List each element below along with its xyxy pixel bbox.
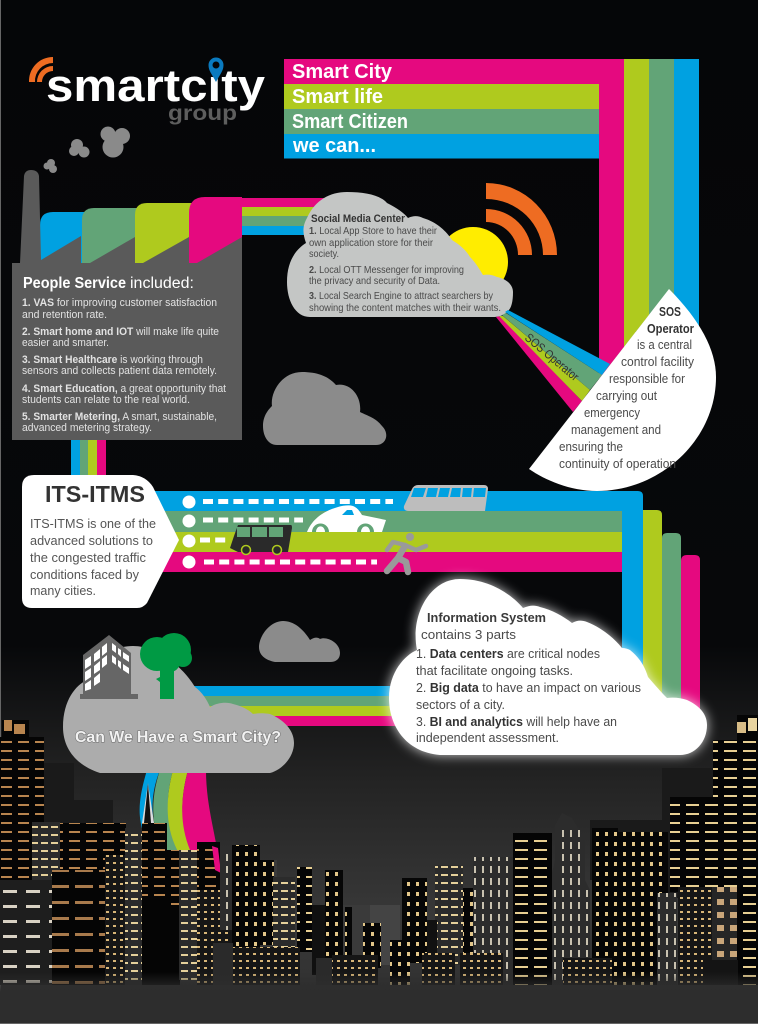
- panel: its-itms: the congested traffic: [30, 550, 146, 565]
- logo: smartcity group: [29, 57, 265, 125]
- panel: people service: People Service: [23, 275, 126, 292]
- panel: people service: 4. Smart Education, a great opportunity that: [22, 383, 226, 395]
- panel: its-itms: ITS-ITMS: [45, 481, 145, 507]
- panel: social media center cloud: showing the content matches with their wants.: [309, 303, 501, 314]
- logo: smartcity group: smartcity: [46, 60, 265, 111]
- panel: people service: easier and smarter.: [22, 337, 109, 349]
- panel: social media center cloud: Social Media Center: [311, 213, 406, 225]
- panel: social media center cloud: [287, 192, 513, 317]
- panel: social media center cloud: 3. Local Search Engine to attract searchers by: [309, 291, 494, 302]
- panel: information system cloud: [389, 579, 707, 755]
- panel: information system cloud: independent assessment.: [416, 730, 559, 745]
- panel: people service: students can relate to the real world.: [22, 394, 190, 406]
- icon: bus: [230, 525, 292, 554]
- panel: social media center cloud: 2. Local OTT Messenger for improving: [309, 265, 464, 276]
- panel: information system cloud: 2. Big data to have an impact on various: [416, 680, 641, 695]
- road stripes: verticals right: [150, 491, 700, 730]
- panel: its-itms: advanced solutions to: [30, 533, 153, 548]
- panel: people service: and retention rate.: [22, 309, 107, 321]
- icon: building: [80, 635, 138, 699]
- skyline: left buildings: [0, 720, 381, 985]
- heading stripes: smart city, life, citizen, we can: we can...: [292, 135, 376, 157]
- decorative cloud: small: [259, 621, 340, 662]
- skyline ground fade: [0, 972, 758, 1024]
- icon: car: [307, 505, 386, 532]
- panel: social media center cloud: 1. Local App Store to have their: [309, 226, 438, 237]
- panel: can we have a smart city cloud: [63, 646, 294, 773]
- road stripes: horizontal lanes: [150, 511, 622, 572]
- decorative cloud: middle: [263, 372, 386, 445]
- panel: sos operator wedge: Operator: [647, 321, 694, 336]
- panel: sos operator wedge: carrying out: [596, 388, 657, 403]
- logo: smartcity group: group: [168, 102, 237, 125]
- panel: sos operator wedge: is a central: [637, 337, 692, 352]
- panel: information system cloud: 1. Data centers are critical nodes: [416, 646, 600, 661]
- skyline: background towers: [44, 763, 722, 965]
- icon: tree: [140, 633, 192, 699]
- heading stripes: smart city, life, citizen, we can: Smart City: [292, 61, 393, 83]
- panel: social media center cloud: the privacy and security of Data.: [309, 276, 440, 287]
- panel: sos operator wedge: responsible for: [609, 371, 686, 386]
- panel: people service: advanced metering strategy.: [22, 422, 152, 434]
- icon: sun: [438, 227, 508, 297]
- panel: people service: included:: [130, 275, 194, 292]
- stem stripes below factory: [71, 438, 106, 478]
- panel: can we have a smart city cloud: Can We Have a Smart City?: [75, 729, 281, 746]
- panel: sos operator wedge: continuity of operation: [559, 456, 676, 471]
- panel: people service: 5. Smarter Metering, A smart, sustainable,: [22, 411, 217, 423]
- icon: wifi arcs: [486, 183, 557, 255]
- panel: sos operator wedge: management and: [571, 422, 661, 437]
- panel: sos operator wedge: ensuring the: [559, 439, 623, 454]
- heading stripes: smart city, life, citizen, we can: [284, 59, 699, 379]
- icon: factory smoke: [44, 126, 130, 173]
- panel: information system cloud: contains 3 parts: [421, 627, 516, 642]
- icon: train: [404, 485, 488, 511]
- lower stripes to cloud: [190, 686, 410, 726]
- stripes from factory to social cloud: [240, 198, 330, 235]
- panel: its-itms: conditions faced by: [30, 567, 139, 582]
- panel: information system cloud: that facilitate ongoing tasks.: [416, 663, 573, 678]
- panel: sos operator wedge: SOS: [659, 304, 681, 319]
- panel: sos operator wedge: control facility: [621, 354, 694, 369]
- rainbow arc under cloud: [140, 770, 220, 872]
- panel: information system cloud: Information System: [427, 610, 546, 625]
- panel: social media center cloud: society.: [309, 249, 339, 260]
- panel: information system cloud: 3. BI and analytics will help have an: [416, 714, 617, 729]
- panel: people service: 3. Smart Healthcare is working through: [22, 354, 203, 366]
- panel: its-itms: ITS-ITMS is one of the: [30, 516, 156, 531]
- panel: people service: [12, 170, 242, 440]
- sos operator beam: SOS Operator: [522, 331, 582, 384]
- panel: its-itms: many cities.: [30, 583, 96, 598]
- lane dots and dashes: [182, 496, 393, 568]
- panel: sos operator wedge: [529, 289, 716, 491]
- heading stripes: smart city, life, citizen, we can: Smart Citizen: [292, 111, 408, 133]
- factory roof tabs: [40, 197, 242, 265]
- panel: its-itms: [22, 475, 179, 608]
- panel: people service: 2. Smart home and IOT will make life quite: [22, 326, 219, 338]
- heading stripes: smart city, life, citizen, we can: Smart life: [292, 86, 383, 108]
- panel: people service: 1. VAS for improving customer satisfaction: [22, 297, 217, 309]
- panel: people service: sensors and collects patient data remotely.: [22, 365, 217, 377]
- panel: sos operator wedge: emergency: [584, 405, 640, 420]
- skyline: right buildings: [390, 715, 758, 985]
- sos operator beam: [496, 310, 610, 412]
- icon: runner: [387, 533, 426, 572]
- panel: information system cloud: sectors of a city.: [416, 697, 505, 712]
- panel: social media center cloud: own application store for their: [309, 238, 434, 249]
